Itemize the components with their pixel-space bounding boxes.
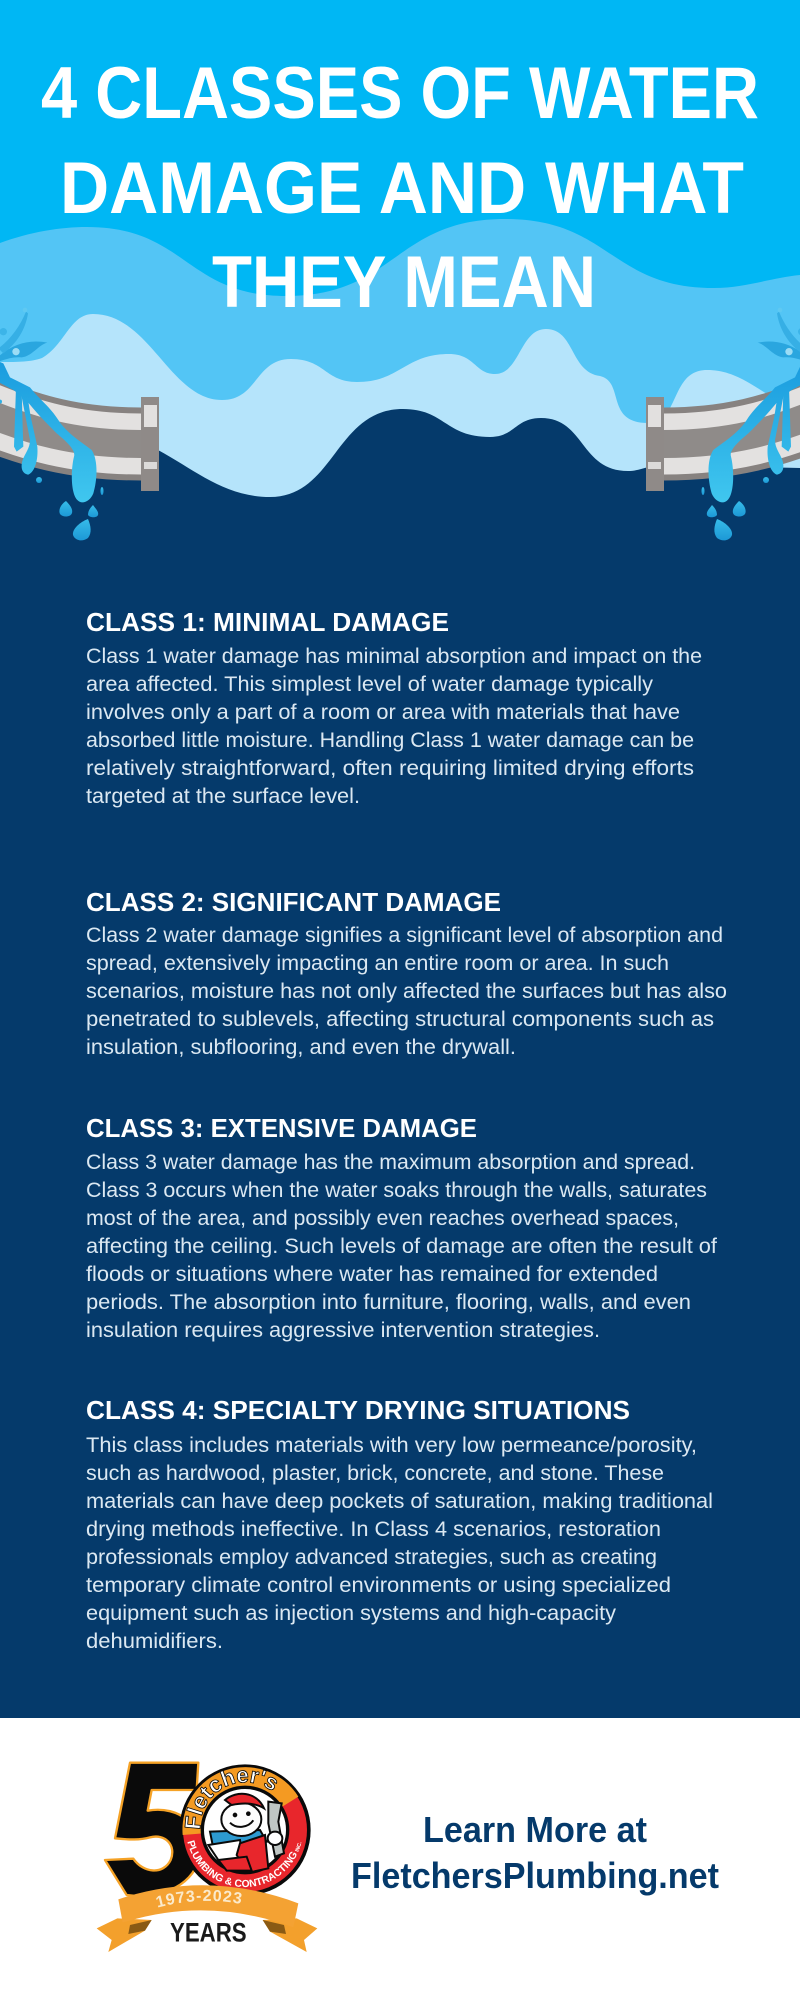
heading: class 3: CLASS 3: EXTENSIVE DAMAGE — [86, 1113, 477, 1143]
footer panel — [0, 1718, 800, 2000]
section: class 2 — [86, 887, 727, 1059]
body: class 1 — [86, 645, 702, 808]
body: class 1: involves only a part of a room or area with materials that have — [86, 701, 680, 724]
body: class 3: Class 3 occurs when the water soaks through the walls, saturates — [86, 1179, 707, 1202]
section: class 4 — [86, 1395, 713, 1653]
body: class 1: Class 1 water damage has minimal absorption and impact on the — [86, 645, 702, 668]
logo: Fletcher's 50 years — [96, 1762, 318, 1952]
icon: right burst pipe — [646, 308, 800, 540]
ribbon: 1973-2023 — [156, 1890, 242, 1908]
call to action — [351, 1809, 719, 1896]
body: class 4: professionals employ advanced strategies, such as creating — [86, 1546, 657, 1569]
body: class 3: insulation requires aggressive intervention strategies. — [86, 1319, 600, 1342]
call to action: Learn More at — [423, 1809, 647, 1850]
body: class 4: such as hardwood, plaster, brick, concrete, and stone. These — [86, 1462, 664, 1485]
badge circle — [180, 1764, 311, 1893]
body: class 4: dehumidifiers. — [86, 1630, 223, 1653]
body: class 3: floods or situations where water has remained for extended — [86, 1263, 658, 1286]
body: class 4: equipment such as injection systems and high-capacity — [86, 1602, 617, 1625]
heading: class 4: CLASS 4: SPECIALTY DRYING SITUATIONS — [86, 1395, 630, 1425]
body: class 4: This class includes materials with very low permeance/porosity, — [86, 1434, 697, 1457]
water drops — [36, 477, 104, 540]
numeral 5 — [105, 1763, 200, 1896]
badge circle: PLUMBING & CONTRACTING INC. — [188, 1840, 302, 1888]
body: class 4: drying methods ineffective. In Class 4 scenarios, restoration — [86, 1518, 661, 1541]
body: class 3 — [86, 1151, 717, 1342]
header background — [0, 0, 800, 560]
heading: class 1: CLASS 1: MINIMAL DAMAGE — [86, 607, 449, 637]
body: class 2: insulation, subflooring, and even the drywall. — [86, 1036, 516, 1059]
water streams and splash — [0, 308, 97, 502]
body: class 3: Class 3 water damage has the maximum absorption and spread. — [86, 1151, 695, 1174]
body: class 1: absorbed little moisture. Handling Class 1 water damage can be — [86, 729, 694, 752]
wave: light blue — [0, 314, 800, 560]
body: class 1: targeted at the surface level. — [86, 785, 360, 808]
body: class 2: spread, extensively impacting an entire room or area. In such — [86, 952, 669, 975]
body: class 2: Class 2 water damage signifies a significant level of absorption and — [86, 924, 723, 947]
badge circle: Fletcher's — [184, 1770, 278, 1829]
title: DAMAGE AND WHAT — [60, 148, 744, 229]
body: class 1: relatively straightforward, often requiring limited drying efforts — [86, 757, 694, 780]
section: class 1 — [86, 607, 702, 808]
years label: YEARS — [170, 1918, 247, 1948]
title: THEY MEAN — [212, 242, 596, 323]
body: class 2 — [86, 924, 727, 1059]
pipe body — [0, 410, 141, 444]
body: class 3: affecting the ceiling. Such levels of damage are often the result of — [86, 1235, 717, 1258]
heading: class 2: CLASS 2: SIGNIFICANT DAMAGE — [86, 887, 501, 917]
body: class 4: materials can have deep pockets of saturation, making traditional — [86, 1490, 713, 1513]
ribbon — [96, 1885, 318, 1952]
call to action: FletchersPlumbing.net — [351, 1855, 719, 1896]
icon: left burst pipe — [0, 308, 159, 540]
mascot — [208, 1794, 284, 1873]
body: class 2: penetrated to sublevels, affecting structural components such as — [86, 1008, 714, 1031]
body: class 2: scenarios, moisture has not only affected the surfaces but has also — [86, 980, 727, 1003]
wave: medium blue — [0, 219, 800, 560]
body: class 1: area affected. This simplest level of water damage typically — [86, 673, 654, 696]
body: class 3: periods. The absorption into furniture, flooring, walls, and even — [86, 1291, 691, 1314]
body: class 3: most of the area, and possibly even reaches overhead spaces, — [86, 1207, 679, 1230]
body: class 4: temporary climate control environments or using specialized — [86, 1574, 671, 1597]
navy content panel — [0, 500, 800, 1718]
pipe flange — [141, 397, 159, 491]
wave: navy — [0, 409, 800, 560]
title — [41, 53, 759, 323]
body: class 4 — [86, 1434, 713, 1653]
section: class 3 — [86, 1113, 717, 1342]
